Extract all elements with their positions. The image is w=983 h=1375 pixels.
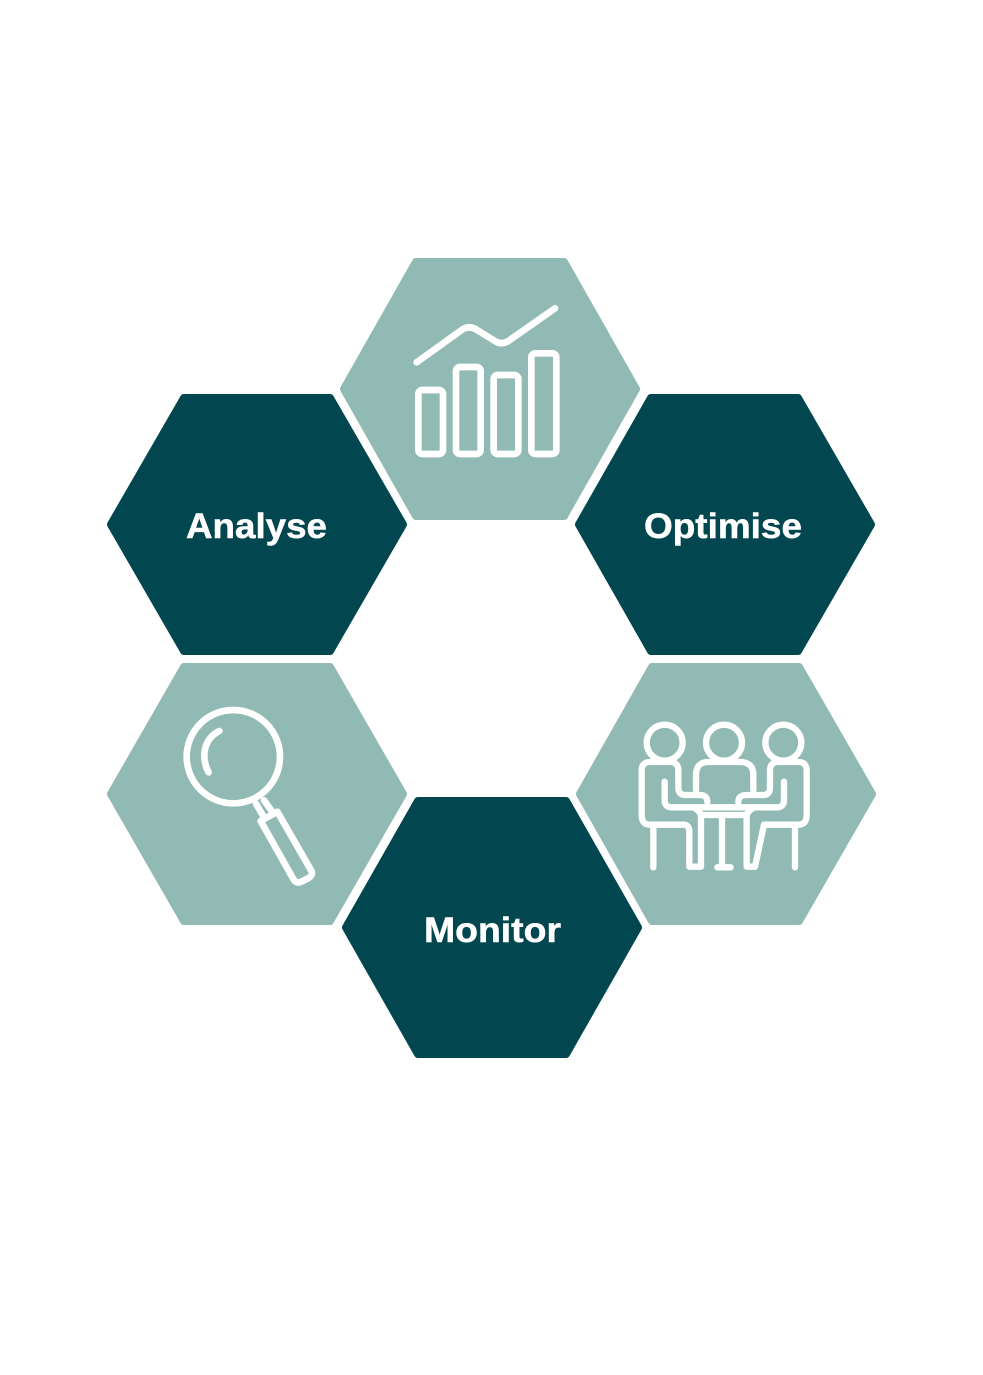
icon: people around a table bbox=[642, 725, 807, 867]
label: Monitor: Monitor bbox=[424, 911, 561, 950]
label: Optimise: Optimise bbox=[644, 507, 802, 546]
icon: magnifying glass bbox=[187, 710, 312, 882]
hexagon: magnifying glass bbox=[111, 667, 403, 921]
hexagon: team meeting bbox=[580, 667, 872, 921]
hexagon: top chart bbox=[344, 262, 636, 516]
hexagon: Optimise bbox=[579, 398, 871, 651]
hexagon: Monitor bbox=[346, 801, 638, 1054]
icon: bar chart with trend line bbox=[417, 308, 556, 454]
hexagon: Analyse bbox=[111, 398, 403, 651]
label: Analyse: Analyse bbox=[186, 507, 327, 546]
